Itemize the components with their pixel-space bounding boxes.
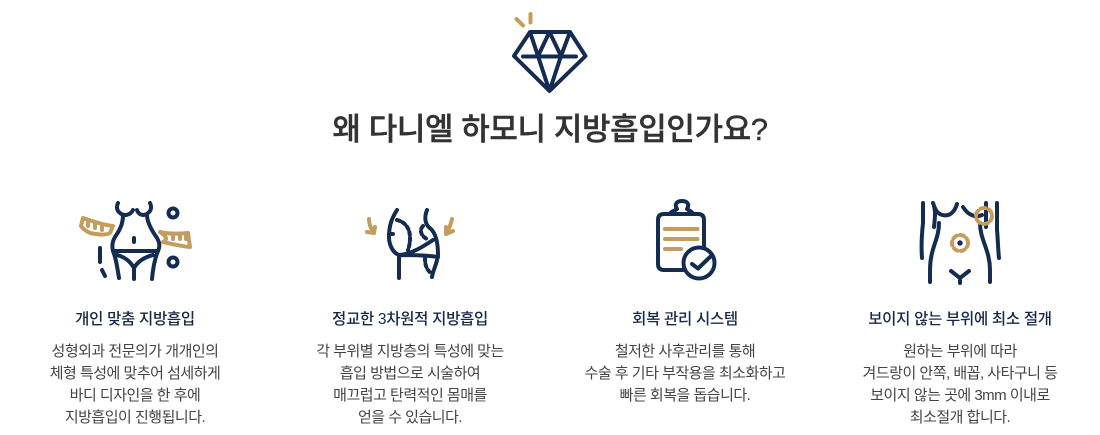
text: minimal incision description: 보이지 않는 곳에 3mm 이내로 <box>870 387 1050 404</box>
icon: body with measuring tapes <box>79 200 192 281</box>
text: minimal incision description: 원하는 부위에 따라 <box>903 343 1017 360</box>
panel: personalized liposuction <box>50 310 220 426</box>
panel: minimal incision <box>863 311 1058 426</box>
title: 왜 다니엘 하모니 지방흡입인가요? <box>332 112 768 147</box>
text: personalized description <box>50 343 220 426</box>
text: precise 3D description: 흡입 방법으로 시술하여 <box>340 365 480 382</box>
text: minimal incision description <box>863 343 1058 426</box>
panel: recovery care system <box>585 311 786 404</box>
text: precise 3D description: 얻을 수 있습니다. <box>358 409 462 426</box>
text: precise 3D description <box>316 343 504 426</box>
text: recovery description <box>585 343 786 404</box>
heading: precise 3D: 정교한 3차원적 지방흡입 <box>332 311 488 328</box>
heading: personalized: 개인 맞춤 지방흡입 <box>75 311 195 328</box>
text: recovery description: 빠른 회복을 돕습니다. <box>620 387 750 404</box>
icon: hip side contour <box>365 208 456 280</box>
icon: torso with hidden incision sites <box>920 200 1001 285</box>
text: precise 3D description: 매끄럽고 탄력적인 몸매를 <box>333 387 487 404</box>
text: personalized description: 바디 디자인을 한 후에 <box>70 387 200 404</box>
text: personalized description: 체형 특성에 맞추어 섬세하게 <box>50 365 220 382</box>
icon: clipboard with check <box>656 199 716 280</box>
text: minimal incision description: 겨드랑이 안쪽, 배꼽, 사타구니 등 <box>863 365 1057 382</box>
heading: minimal incision: 보이지 않는 부위에 최소 절개 <box>868 311 1052 328</box>
heading: recovery: 회복 관리 시스템 <box>632 311 738 328</box>
text: personalized description: 지방흡입이 진행됩니다. <box>65 409 205 426</box>
text: minimal incision description: 최소절개 합니다. <box>910 409 1010 426</box>
text: precise 3D description: 각 부위별 지방층의 특성에 맞는 <box>316 343 504 360</box>
icon: diamond <box>512 12 588 94</box>
text: recovery description: 수술 후 기타 부작용을 최소화하고 <box>585 365 785 382</box>
text: personalized description: 성형외과 전문의가 개개인의 <box>52 343 218 360</box>
text: recovery description: 철저한 사후관리를 통해 <box>615 343 755 360</box>
panel: precise 3D liposuction <box>316 310 504 426</box>
